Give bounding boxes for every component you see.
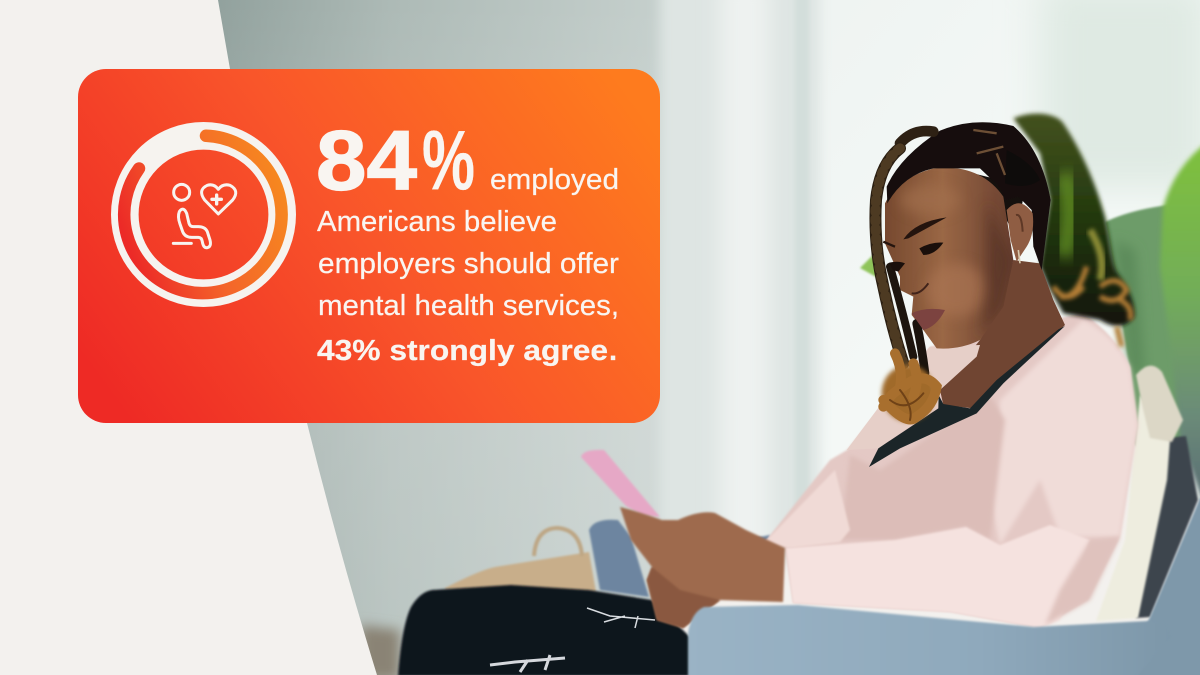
headline statistic: 84 (316, 114, 417, 208)
cream pillow with tassel (1096, 366, 1183, 621)
dark undershirt (869, 326, 1065, 467)
dark patterned trousers (398, 585, 690, 675)
body text: 43% strongly agree (317, 335, 608, 367)
pale collar (847, 345, 980, 450)
large green leaf at right edge (1160, 140, 1200, 520)
wicker basket (445, 528, 596, 592)
headline statistic: % (422, 114, 475, 208)
panel: orange gradient statistic card (78, 69, 660, 423)
leaf behind the woman (860, 253, 878, 278)
icon: seated person with heart and medical cross (173, 184, 236, 248)
ponytail with green tint (1013, 114, 1134, 347)
hair behind the temple (933, 163, 1023, 240)
body text: employed (490, 164, 619, 196)
neck and chest (940, 260, 1065, 408)
headline statistic (316, 114, 475, 208)
ear and earring (1007, 203, 1033, 263)
body text: Americans believe (317, 206, 557, 238)
blue armchair arm in foreground (688, 605, 1172, 675)
pink cardigan (764, 313, 1138, 628)
blue side of the armchair (1120, 498, 1200, 675)
dark side of the armchair (1136, 436, 1198, 618)
body text: . (609, 335, 617, 367)
armchair back, green blurred foreground (1105, 205, 1190, 500)
beige curved background shape (0, 0, 377, 675)
body text (317, 164, 619, 367)
hair: top of head (887, 122, 1051, 270)
left chair arm (589, 520, 770, 597)
woman's head, neck and hair (847, 114, 1134, 467)
hands and pink phone (581, 450, 785, 628)
facial features (883, 217, 947, 330)
side braids with curled tips (875, 131, 937, 422)
body text: employers should offer (318, 248, 619, 280)
face (885, 168, 1013, 349)
progress ring showing 84% (124, 136, 282, 293)
body text: mental health services, (318, 290, 619, 322)
